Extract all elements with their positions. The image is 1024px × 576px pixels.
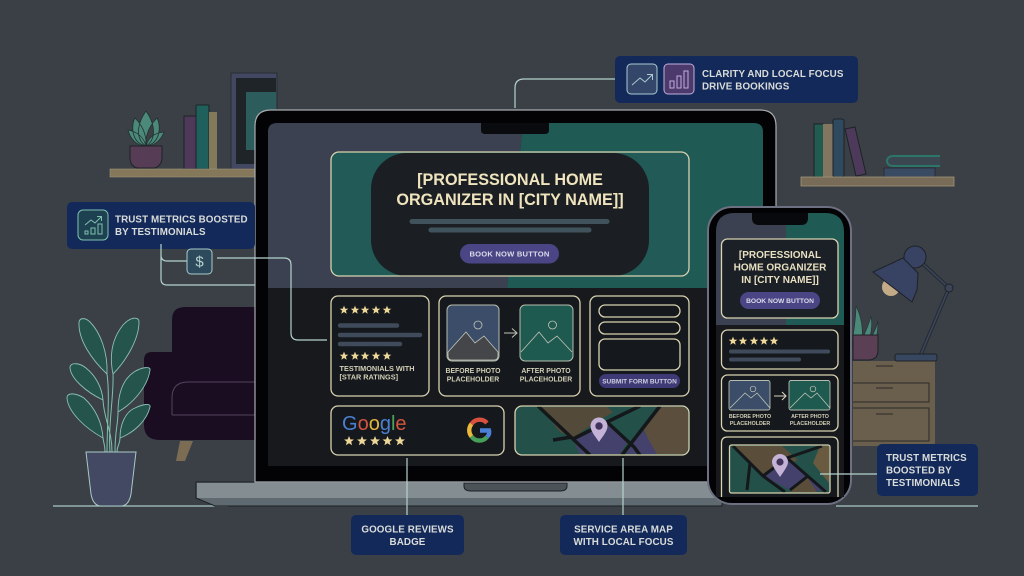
callout: phone trust metrics: BOOSTED BY — [886, 466, 952, 476]
hero title: ORGANIZER IN [CITY NAME]] — [396, 191, 624, 209]
google g icon — [469, 420, 489, 441]
testimonials card — [331, 296, 429, 396]
before and after card: PLACEHOLDER — [447, 376, 499, 384]
callout: top clarity and local focus — [515, 56, 858, 108]
phone notch — [752, 213, 808, 225]
callout: top clarity and local focus: CLARITY AND LOCAL FOCUS — [702, 69, 844, 80]
phone hero card: IN [CITY NAME]] — [741, 275, 819, 286]
callout: phone trust metrics: TESTIMONIALS — [886, 478, 960, 489]
icon: dollar: $ — [195, 254, 204, 270]
right wall shelf with books — [801, 119, 954, 186]
icon: dollar — [187, 249, 212, 274]
callout: google reviews badge: GOOGLE REVIEWS — [361, 524, 454, 536]
floor plant — [67, 318, 150, 506]
callout: service area map — [560, 458, 687, 555]
phone before and after card: PLACEHOLDER — [730, 421, 770, 427]
after photo placeholder — [520, 305, 573, 361]
phone before and after card: AFTER PHOTO — [791, 414, 829, 420]
callout: top clarity and local focus: DRIVE BOOKINGS — [702, 82, 790, 92]
icon: bar chart — [664, 64, 694, 94]
laptop camera notch — [481, 123, 549, 134]
icon: trend line — [627, 64, 657, 94]
service area map — [515, 406, 689, 455]
hero section — [331, 152, 689, 276]
before and after card: BEFORE PHOTO — [445, 368, 501, 375]
phone hero card: HOME ORGANIZER — [734, 262, 827, 274]
callout: phone trust metrics — [820, 444, 978, 496]
phone button: BOOK NOW BUTTON — [746, 298, 814, 305]
testimonials card: TESTIMONIALS WITH — [340, 364, 414, 373]
phone hero card: [PROFESSIONAL — [739, 250, 821, 261]
callout: service area map: WITH LOCAL FOCUS — [574, 537, 674, 548]
map pin — [590, 418, 608, 442]
armchair — [144, 307, 258, 461]
phone before and after card — [722, 375, 838, 431]
google reviews badge — [331, 406, 504, 455]
phone — [708, 207, 851, 504]
phone reviews card — [722, 330, 838, 369]
phone map pin — [772, 454, 788, 477]
icon: growth chart — [78, 210, 108, 240]
callout: phone trust metrics: TRUST METRICS — [886, 453, 967, 464]
connector lines and dollar icon — [161, 244, 327, 340]
rating stars — [344, 436, 405, 445]
bedside cabinet with plant and lamp — [853, 246, 953, 446]
book now button: BOOK NOW BUTTON — [469, 250, 550, 258]
hero title: [PROFESSIONAL HOME — [417, 171, 603, 189]
laptop — [196, 110, 776, 506]
testimonials card: [STAR RATINGS] — [340, 372, 399, 382]
callout: google reviews badge — [351, 458, 464, 555]
hero text lines — [412, 222, 607, 230]
laptop base — [196, 482, 722, 506]
submit button: SUBMIT FORM BUTTON — [602, 378, 677, 386]
hero dark panel — [371, 153, 649, 276]
phone hero card — [722, 239, 838, 318]
laptop body and screen — [255, 110, 776, 482]
left wall shelf with plant, books and frame — [110, 73, 277, 177]
arrow — [504, 328, 517, 338]
contact form card — [590, 296, 689, 396]
google wordmark: Google — [342, 413, 407, 435]
before and after card: PLACEHOLDER — [520, 376, 572, 384]
phone before and after card: BEFORE PHOTO — [729, 414, 771, 420]
callout: left trust metrics — [67, 202, 255, 249]
callout: google reviews badge: BADGE — [390, 537, 426, 548]
callout: left trust metrics: BY TESTIMONIALS — [115, 227, 206, 238]
book now button — [460, 244, 559, 264]
callout: left trust metrics: TRUST METRICS BOOSTED — [115, 214, 248, 226]
before photo placeholder — [447, 305, 499, 361]
before and after card: AFTER PHOTO — [521, 368, 571, 375]
phone map card — [722, 437, 838, 497]
before and after card — [439, 296, 580, 396]
floor line — [53, 505, 978, 507]
callout: service area map: SERVICE AREA MAP — [574, 524, 673, 536]
phone before and after card: PLACEHOLDER — [790, 421, 830, 427]
